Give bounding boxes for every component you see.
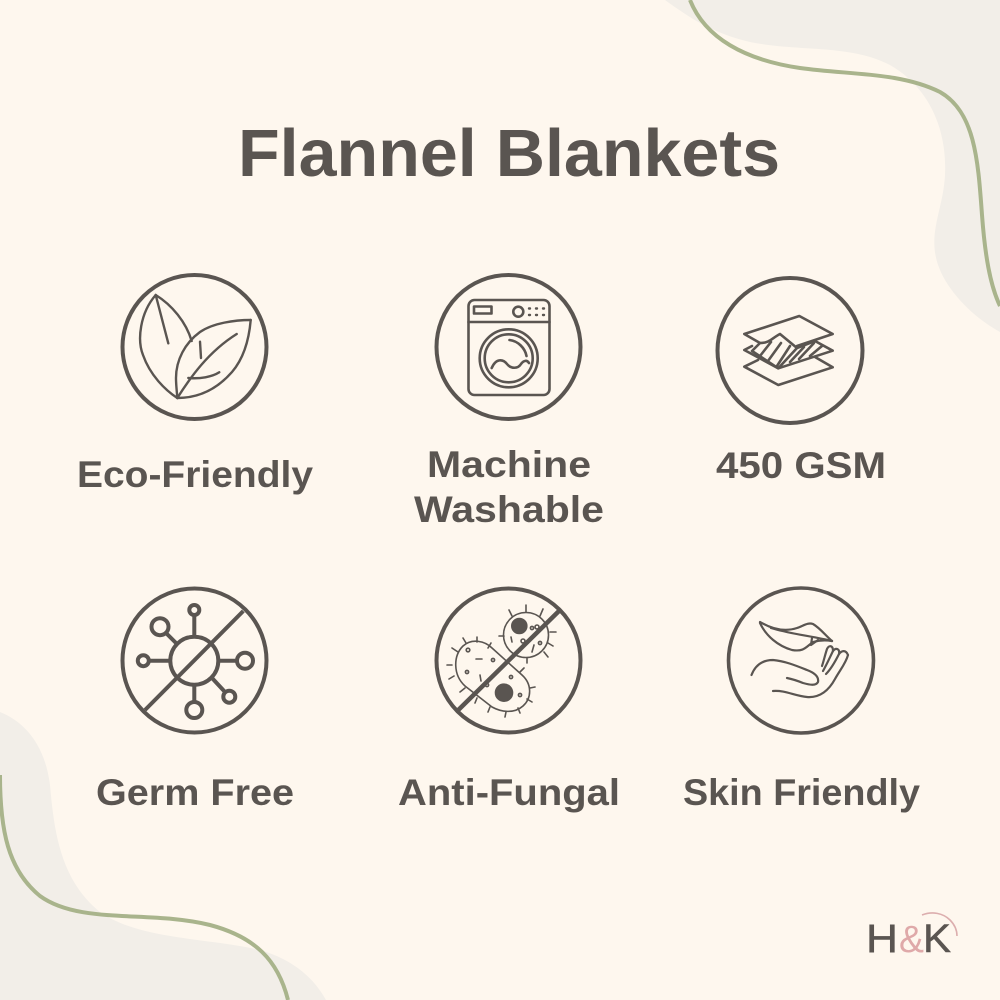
label: Eco-Friendly: Eco-Friendly [77,454,313,495]
logo: H&K: H [866,917,898,961]
label: Machine Washable: Washable [414,489,604,530]
logo: H&K: K [923,917,951,961]
label: Germ Free: Germ Free [96,772,294,813]
label: Machine Washable: Machine [427,444,591,485]
background shape: top right [665,0,1000,332]
title: Flannel Blankets [238,116,780,191]
label: Skin Friendly: Skin Friendly [683,772,920,813]
logo: H&K [866,913,957,961]
icon: fabric layers [718,278,862,423]
logo: H&K: & [899,919,924,961]
icon: germ crossed out [122,588,266,732]
icon: bacteria crossed out [436,588,580,732]
label: Machine Washable [414,444,604,530]
icon: leaves [122,275,266,419]
label: Anti-Fungal: Anti-Fungal [398,772,620,813]
background shape: bottom left [0,712,326,1000]
label: 450 GSM: 450 GSM [716,445,886,486]
icon: washing machine [436,275,580,419]
icon: hand and feather [728,588,874,733]
